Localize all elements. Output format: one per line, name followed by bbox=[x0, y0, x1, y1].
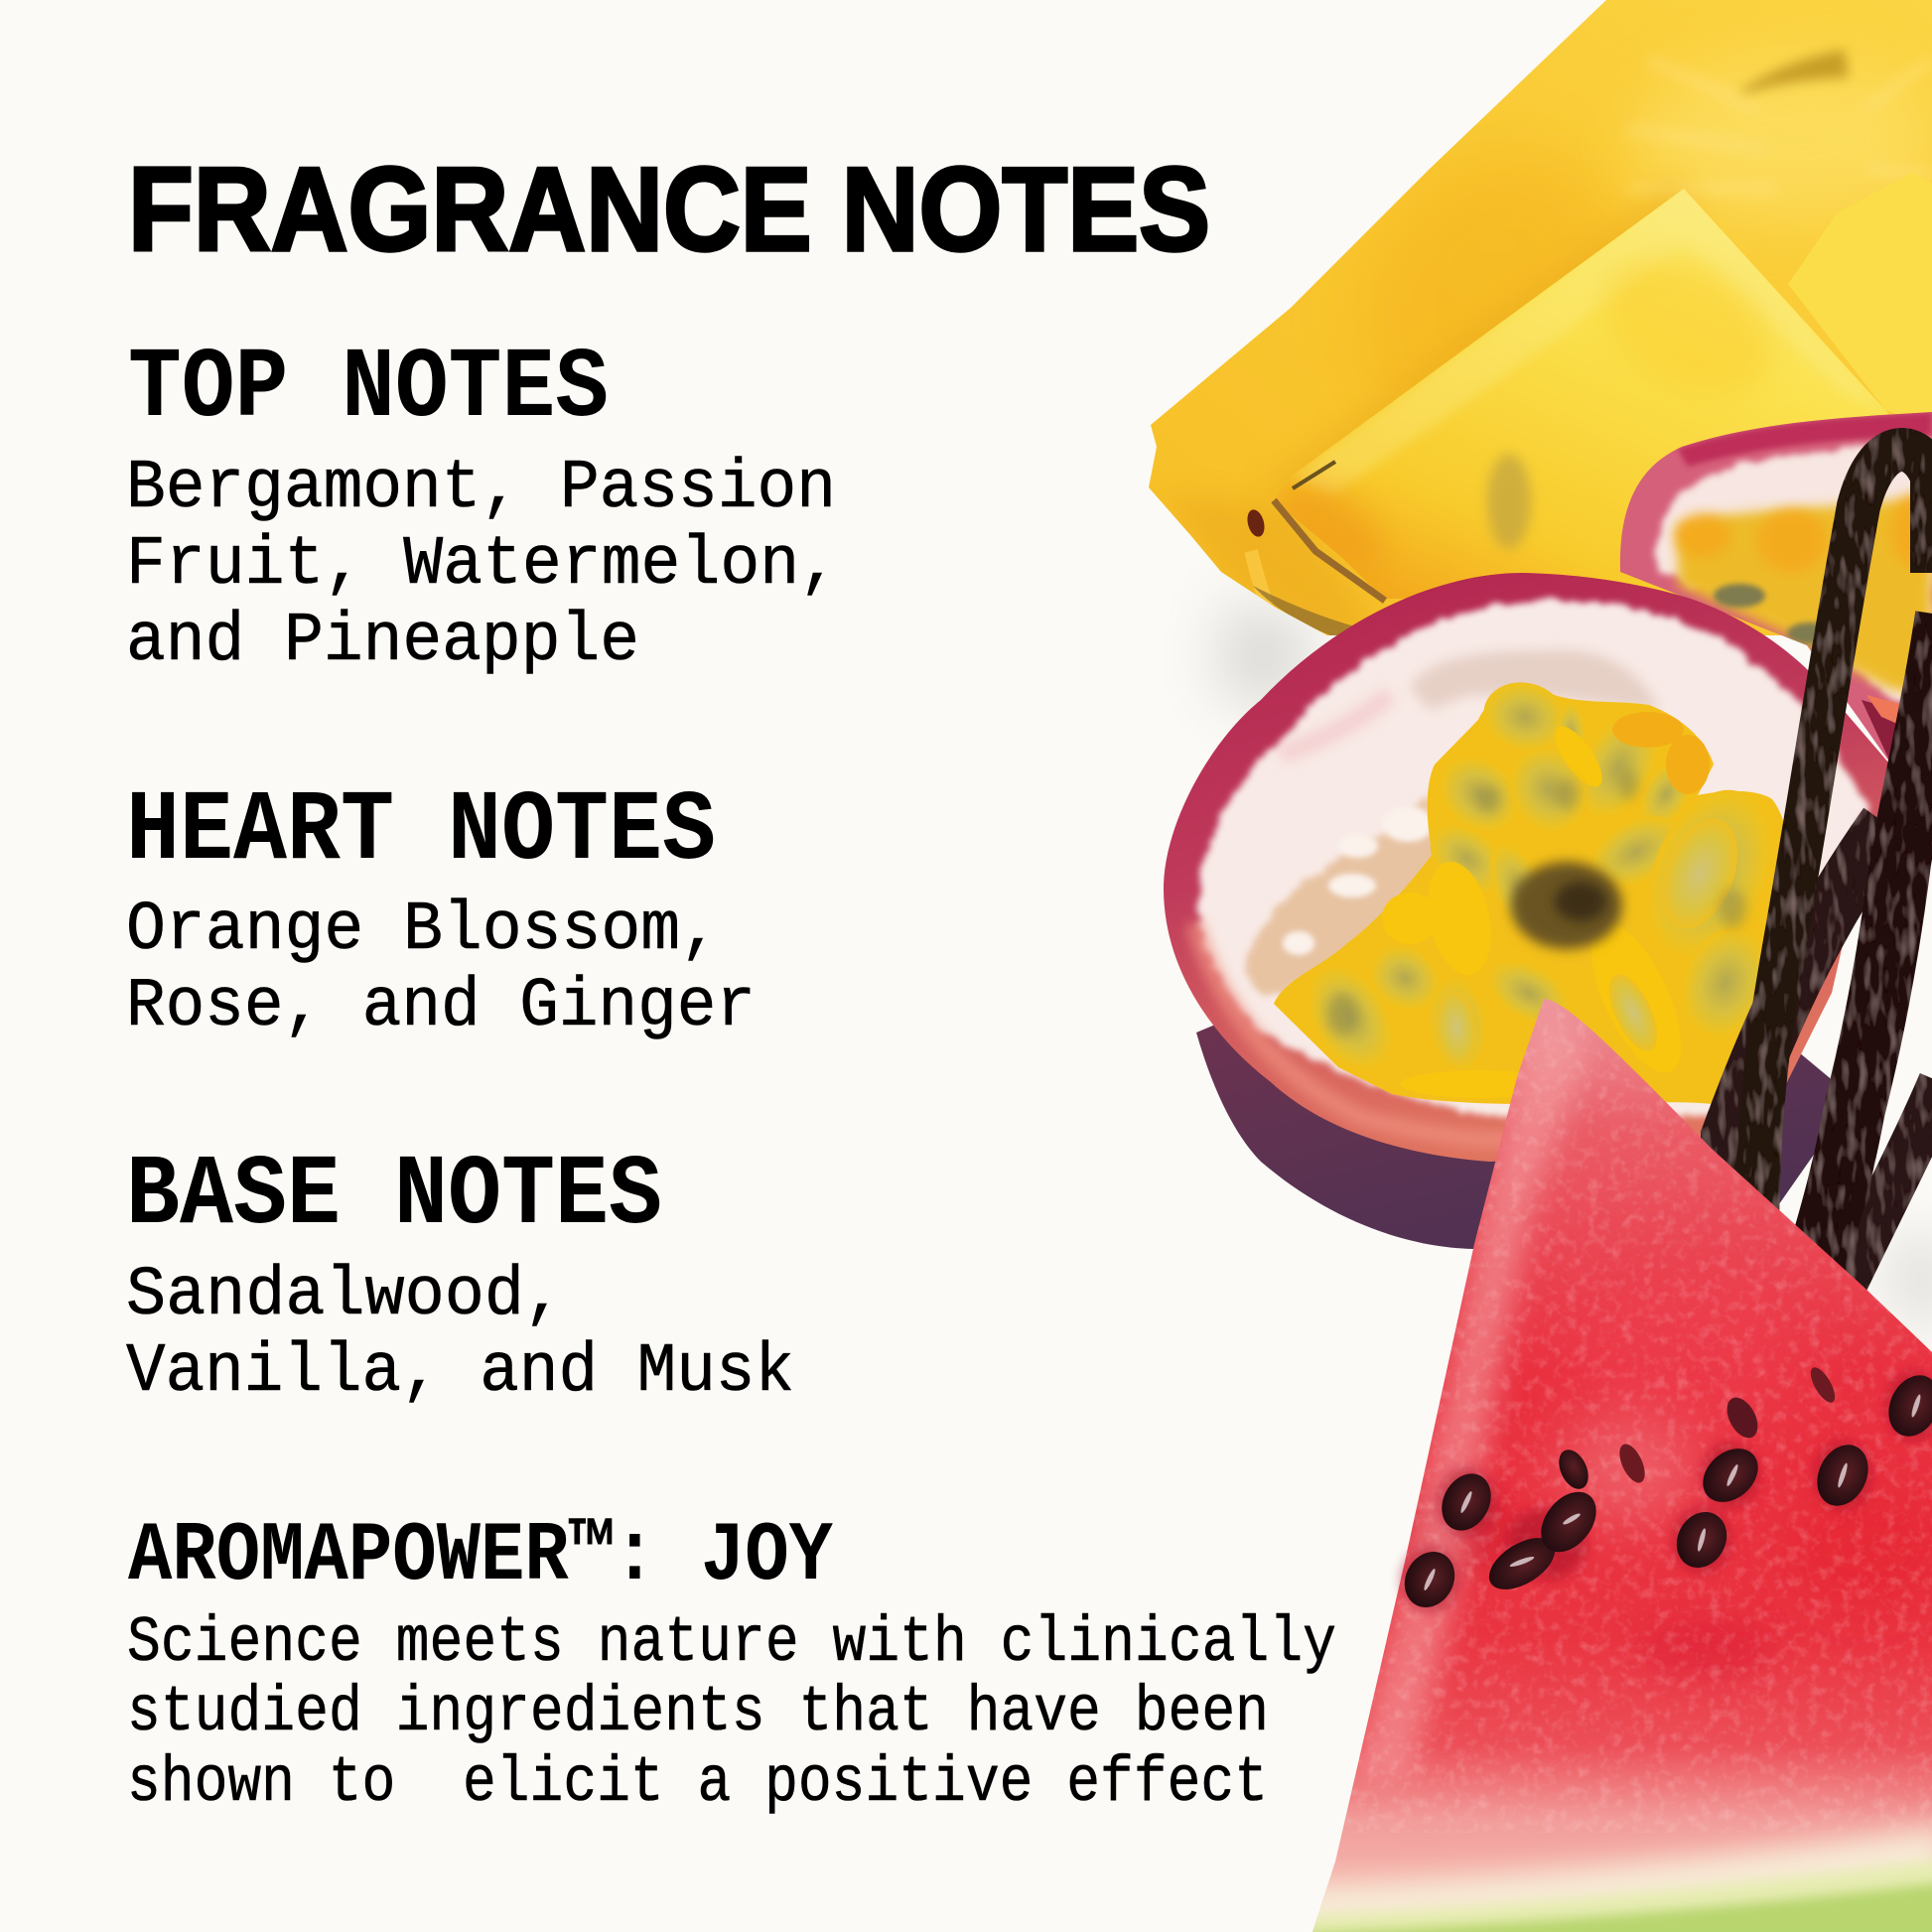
icon: right pineapple wedge bbox=[1788, 173, 1932, 427]
passion fruit pulp bbox=[1274, 673, 1794, 1104]
icon: back passion fruit half bbox=[1620, 412, 1932, 784]
panel: base notes bbox=[126, 1141, 794, 1412]
text: top notes list: and Pineapple bbox=[126, 603, 639, 681]
heading: aromapower: AROMAPOWER™: JOY bbox=[128, 1510, 834, 1604]
watermelon rind bbox=[1281, 1827, 1932, 1932]
soft shadows bbox=[1216, 596, 1932, 1330]
passion fruit skin bbox=[1196, 993, 1847, 1249]
heading: heart notes: HEART NOTES bbox=[126, 776, 716, 889]
illustration: fruit collage bbox=[1149, 0, 1932, 1932]
text: top notes list: Bergamont, Passion bbox=[126, 450, 836, 528]
passion fruit white flesh bbox=[1194, 600, 1868, 1140]
panel: heart notes bbox=[126, 776, 756, 1046]
passion fruit cavity bbox=[1410, 649, 1660, 710]
text: heart notes list: Rose, and Ginger bbox=[126, 968, 756, 1046]
passion fruit rim bbox=[1164, 573, 1895, 1162]
text: base notes list: Sandalwood, bbox=[126, 1257, 564, 1335]
icon: vanilla pods bbox=[1713, 450, 1932, 1301]
text: aromapower description: studied ingredients that have been bbox=[127, 1676, 1269, 1749]
text: top notes list: Fruit, Watermelon, bbox=[126, 526, 839, 605]
text: base notes list: Vanilla, and Musk bbox=[126, 1333, 794, 1412]
text: base notes list bbox=[126, 1257, 794, 1412]
text: heart notes list: Orange Blossom, bbox=[126, 892, 720, 970]
icon: main passion fruit half bbox=[1164, 573, 1895, 1249]
heading: top notes: TOP NOTES bbox=[128, 334, 609, 446]
title: FRAGRANCE NOTES bbox=[128, 143, 1210, 276]
text: aromapower description: Science meets nature with clinically bbox=[127, 1606, 1336, 1680]
watermelon seeds bbox=[1395, 1364, 1932, 1616]
heading: base notes: BASE NOTES bbox=[126, 1141, 662, 1253]
panel: aromapower joy bbox=[127, 1510, 1336, 1820]
icon: watermelon slice bbox=[1281, 999, 1932, 1932]
seed highlights bbox=[1423, 1394, 1922, 1591]
text: aromapower description bbox=[127, 1606, 1336, 1820]
text: heart notes list bbox=[126, 892, 756, 1046]
icon: back pineapple wedge bbox=[1149, 0, 1932, 635]
text: aromapower description: shown to elicit a positive effect bbox=[127, 1746, 1268, 1820]
panel: top notes bbox=[126, 334, 839, 681]
text: top notes list bbox=[126, 450, 839, 681]
icon: front pineapple wedge bbox=[1265, 189, 1932, 601]
